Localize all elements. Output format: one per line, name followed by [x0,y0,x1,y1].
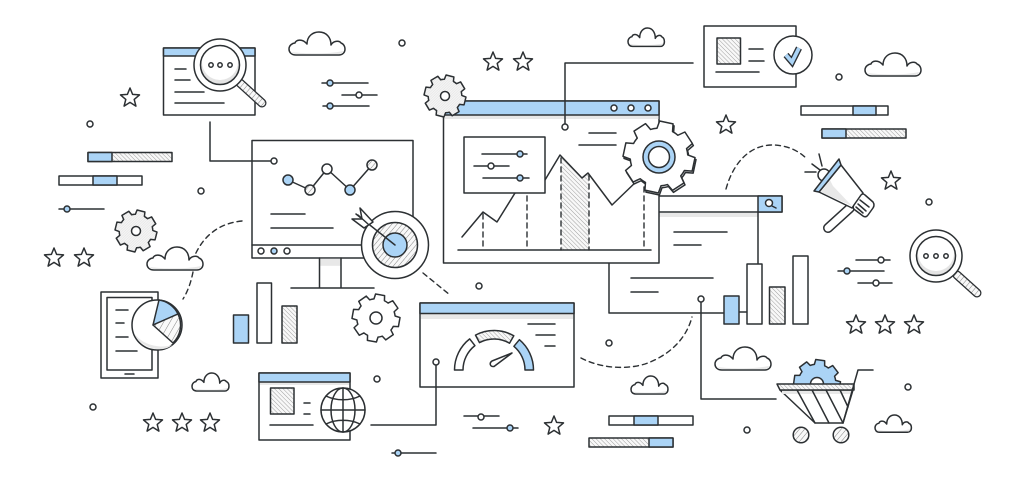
cloud: lower right [875,415,911,432]
progress bar: left 1 [88,152,172,162]
progress bar: left 2 [59,176,142,185]
cloud: top centre [628,28,664,46]
connector: globe window to gauge [371,365,436,425]
panel: window with globe [259,373,365,440]
icon: outline gear [349,291,403,345]
sliders: right [838,257,892,286]
cloud: top centre-left [289,32,345,55]
icon: check badge [774,36,812,74]
icon: megaphone [805,154,874,228]
icon: magnifier, right [910,230,977,293]
stars: bottom left [144,413,220,431]
connector: search window to cart [698,296,776,399]
panel: main dashboard window [444,101,659,263]
slider: left [59,206,104,212]
progress bar: right 1 [801,106,888,115]
panel: card with check badge [704,26,812,87]
sliders: bottom centre [464,414,518,431]
sliders: top [322,80,377,109]
icon: target with arrow [352,208,428,278]
cloud: top right [865,53,921,76]
sliders box [464,137,545,193]
star: top left [120,88,140,106]
panel: search bar window [609,196,782,313]
star: bottom centre [544,416,564,434]
icon: hatched gear, left [111,206,161,256]
dashed arrow: target to gauge [423,273,450,295]
line chart [283,160,377,195]
icon: globe [321,388,365,432]
dashed arrow: gauge to window [581,317,692,367]
cloud: lower left [192,373,229,391]
stars: top centre [484,52,532,70]
speedometer [454,330,534,370]
progress bar: right 2 [822,129,906,138]
dashed arrow: monitor to cloud [195,221,242,255]
bar chart: right [724,256,808,324]
dots: scattered small circles [87,40,932,433]
panel: tablet with pie chart [101,292,182,378]
pie chart [132,300,182,350]
dashed arrow: search to megaphone [726,145,807,189]
dashed arrow: cloud to pie [183,272,193,299]
star: above search bar [716,115,736,133]
bar chart: left [234,283,297,343]
panel: search results window with magnifier [164,39,262,115]
panel: monitor with line chart [252,140,413,288]
cloud: lower centre [631,376,668,394]
progress bar: bottom 1 [609,416,693,425]
stars: right row [846,315,924,333]
slider: bottom [392,450,436,456]
star: right of megaphone [882,171,900,189]
icon: shopping cart with gear [777,357,873,443]
panel: gauge window [420,303,574,387]
icon: large blue gear [617,115,702,201]
cloud: above cart [715,347,771,370]
stars: left [44,248,94,266]
connector: search window to monitor [210,122,277,164]
connector: dashboard to check card [562,63,693,130]
icon: magnifier [194,39,262,103]
cloud: left [147,247,203,270]
progress bar: bottom 2 [589,438,673,447]
icon: small hatched gear, window corner [420,71,470,121]
area chart [458,155,651,250]
